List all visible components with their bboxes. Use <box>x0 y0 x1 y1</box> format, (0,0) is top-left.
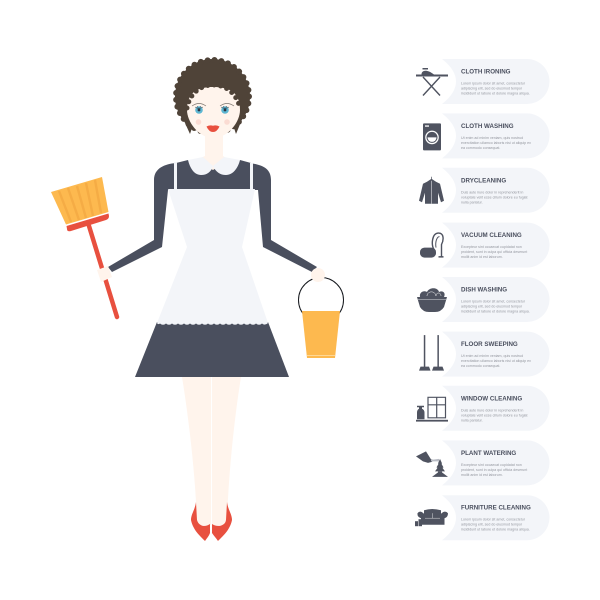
bristle stripes <box>59 180 101 222</box>
icon: washing machine <box>423 123 441 150</box>
heading: FURNITURE CLEANING <box>461 505 531 512</box>
description: Lorem ipsum dolor sit amet, consectetur <box>461 82 526 86</box>
description: voluptate velit esse cillum dolore eu fugiat <box>461 413 528 417</box>
description: adipiscing elit, sed do eiusmod tempor <box>461 523 523 527</box>
heading: VACUUM CLEANING <box>461 232 522 239</box>
icon: watering can and plant <box>416 451 448 477</box>
description: Excepteur sint occaecat cupidatat non <box>461 463 522 467</box>
neck <box>196 130 230 170</box>
broom head base <box>66 214 109 231</box>
torso <box>176 160 251 192</box>
icon: window and spray bottle <box>416 397 448 422</box>
service list <box>415 59 550 540</box>
right arm <box>250 163 317 272</box>
hair fringe <box>187 85 240 108</box>
heading: FLOOR SWEEPING <box>461 341 518 348</box>
row: dish washing <box>417 277 550 322</box>
bucket highlight <box>307 354 335 357</box>
shoes <box>191 502 232 541</box>
broom bristles <box>51 177 108 224</box>
icon: vacuum cleaner <box>420 233 444 258</box>
maid figure <box>51 59 344 541</box>
panel <box>442 168 550 213</box>
eyes <box>192 104 234 114</box>
description: ea commodo consequat. <box>461 364 500 368</box>
hair <box>175 59 250 134</box>
description: Lorem ipsum dolor sit amet, consectetur <box>461 300 526 304</box>
left hand <box>97 266 112 282</box>
panel <box>442 59 550 104</box>
bucket handle <box>298 278 344 322</box>
panel <box>442 495 550 540</box>
broom handle <box>89 226 117 317</box>
description: Duis aute irure dolor in reprehenderit in <box>461 408 523 412</box>
panel <box>442 386 550 431</box>
description: nulla pariatur. <box>461 200 483 204</box>
heading: DRYCLEANING <box>461 177 506 184</box>
description: incididunt ut labore et dolore magna aliqua. <box>461 528 530 532</box>
heading: CLOTH IRONING <box>461 68 511 76</box>
row: furniture cleaning <box>415 495 550 540</box>
description: adipiscing elit, sed do eiusmod tempor <box>461 86 523 90</box>
description: voluptate velit esse cillum dolore eu fugiat <box>461 195 528 199</box>
row: window cleaning <box>416 386 550 431</box>
description: mollit anim id est laborum. <box>461 473 503 477</box>
panel <box>442 277 550 322</box>
legs <box>182 377 241 525</box>
heading: CLOTH WASHING <box>461 123 514 130</box>
description: proident, sunt in culpa qui officia deserunt <box>461 250 527 254</box>
row: floor sweeping <box>419 332 550 377</box>
description: ea commodo consequat. <box>461 146 500 150</box>
apron <box>157 189 268 325</box>
description: exercitation ullamco laboris nisi ut aliquip ex <box>461 141 531 145</box>
description: incididunt ut labore et dolore magna aliqua. <box>461 310 530 314</box>
description: Ut enim ad minim veniam, quis nostrud <box>461 136 523 140</box>
description: Lorem ipsum dolor sit amet, consectetur <box>461 518 526 522</box>
face <box>187 87 240 138</box>
icon: two brooms <box>419 335 444 371</box>
icon: dish basin with bubbles <box>417 288 447 312</box>
panel <box>442 440 550 485</box>
icon: jacket on hanger <box>419 177 444 204</box>
row: vacuum cleaning <box>420 223 550 268</box>
bucket body <box>302 311 340 358</box>
description: proident, sunt in culpa qui officia deserunt <box>461 468 527 472</box>
description: adipiscing elit, sed do eiusmod tempor <box>461 304 523 308</box>
heading: DISH WASHING <box>461 286 507 294</box>
row: plant watering <box>416 440 550 485</box>
description: Ut enim ad minim veniam, quis nostrud <box>461 354 523 358</box>
description: nulla pariatur. <box>461 418 483 422</box>
broom <box>51 177 117 317</box>
description: mollit anim id est laborum. <box>461 255 503 259</box>
panel <box>442 223 550 268</box>
apron straps <box>174 162 253 190</box>
skirt <box>135 322 289 377</box>
left arm <box>108 163 176 272</box>
panel <box>442 113 550 158</box>
description: exercitation ullamco laboris nisi ut aliquip ex <box>461 359 531 363</box>
row: cloth ironing <box>416 59 550 104</box>
description: Duis aute irure dolor in reprehenderit in <box>461 190 523 194</box>
bucket <box>298 278 344 358</box>
icon: sofa and cleaning bottles <box>415 509 448 526</box>
heading: WINDOW CLEANING <box>461 395 522 402</box>
description: incididunt ut labore et dolore magna aliqua. <box>461 92 530 96</box>
cheeks <box>196 119 230 125</box>
row: cloth washing <box>423 113 550 158</box>
lips <box>206 125 220 132</box>
description: Excepteur sint occaecat cupidatat non <box>461 245 522 249</box>
collar <box>188 157 240 175</box>
row: drycleaning <box>419 168 550 213</box>
heading: PLANT WATERING <box>461 450 516 457</box>
panel <box>442 332 550 377</box>
icon: iron and board <box>416 68 448 96</box>
right hand <box>311 268 325 282</box>
